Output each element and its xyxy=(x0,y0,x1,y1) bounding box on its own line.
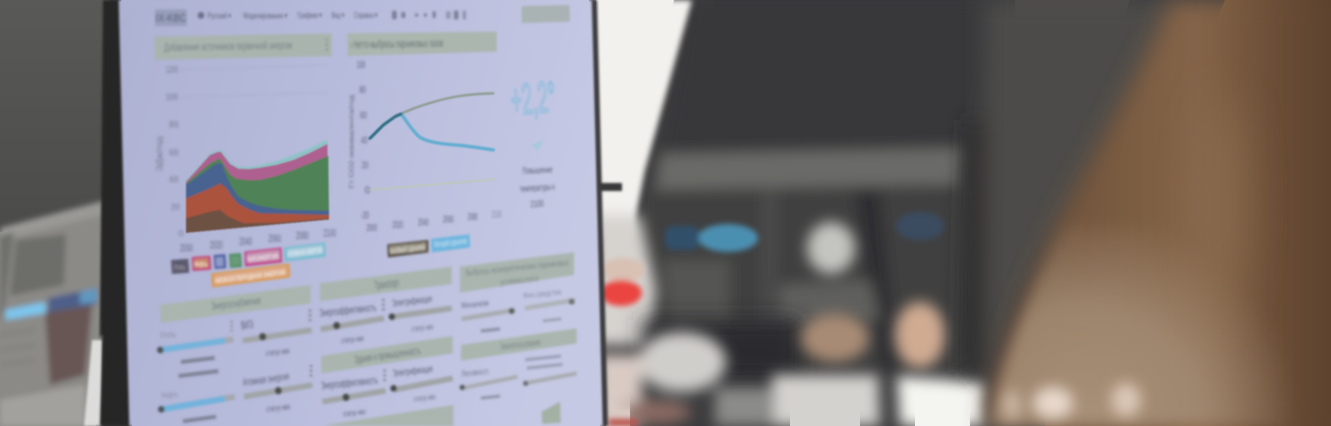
area chart legend: Уголь xyxy=(174,262,186,271)
logo xyxy=(155,9,187,26)
skin-tone objects xyxy=(801,302,945,368)
control section: energy supply: Энергоснабжение xyxy=(211,295,262,313)
area chart axes: 600 xyxy=(169,147,179,157)
desk items xyxy=(596,332,985,426)
line chart axes: -20 xyxy=(361,211,369,222)
area chart axes: 1000 xyxy=(166,92,178,102)
slider: electrification: Электрификация xyxy=(392,293,433,310)
slider: coal: Уголь xyxy=(159,329,176,340)
screen background xyxy=(119,0,603,426)
hair xyxy=(985,0,1331,426)
line chart axes: 2000 xyxy=(366,223,377,234)
monitor bezel xyxy=(100,0,608,426)
section heading xyxy=(320,267,452,301)
area chart axes xyxy=(155,64,336,255)
slider: energy efficiency xyxy=(319,299,384,345)
control section: land use xyxy=(460,328,577,424)
area chart axes: 2080 xyxy=(296,230,309,242)
temperature caption: Повышение xyxy=(522,164,553,176)
area chart legend xyxy=(171,242,326,287)
line chart axes xyxy=(349,60,502,234)
slider: energy efficiency: статус-кво xyxy=(341,334,365,345)
line chart axes: 2040 xyxy=(418,217,429,228)
temperature widget xyxy=(509,73,558,209)
temperature arrow xyxy=(531,139,543,151)
menu: Справка ▾ xyxy=(354,10,378,20)
monitor screen dashboard: 2100 xyxy=(492,209,502,220)
line chart axes: 0 xyxy=(365,186,371,197)
line chart axes: 40 xyxy=(361,136,368,147)
panel heading: primary energy sources xyxy=(154,33,332,60)
control section: transport xyxy=(319,267,452,345)
slider: energy efficiency: Энергоэффективность xyxy=(321,374,379,392)
line chart axes: Гт CO2-эквивалента/год xyxy=(349,95,356,188)
area chart axes: 400 xyxy=(169,174,179,184)
line chart axes: 2060 xyxy=(443,215,454,226)
control section: buildings and industry xyxy=(321,336,453,419)
monitor screen dashboard xyxy=(119,0,603,426)
control section: transport: Транспорт xyxy=(374,275,400,292)
stacked area chart xyxy=(155,64,336,287)
slider: coal xyxy=(157,321,233,378)
temperature caption: температуры к xyxy=(519,182,556,194)
temperature caption xyxy=(519,164,556,209)
bright globe xyxy=(807,222,855,274)
control section: non-energy emissions: Выбросы неэнергетических парниковых xyxy=(465,257,569,278)
toolbar icons xyxy=(392,11,466,19)
small dark bracket xyxy=(598,183,622,191)
slider: electrification: статус-кво xyxy=(413,392,436,404)
area layers xyxy=(186,139,329,233)
left background wall xyxy=(0,0,110,235)
area chart axes: 800 xyxy=(169,120,179,130)
lower white wall xyxy=(592,215,656,345)
control section: non-energy emissions xyxy=(460,252,575,333)
area chart legend: БИОЭНЕРГИЯ xyxy=(247,251,279,264)
area chart axes: 2100 xyxy=(323,227,336,239)
area chart legend: АТОМНАЯ ЭНЕРГИЯ xyxy=(287,245,323,259)
top navigation bar xyxy=(155,5,570,26)
line chart: net emissions xyxy=(349,60,502,257)
slider: oil: Нефть xyxy=(161,389,179,400)
area chart legend: НИЗКОУГЛЕРОДНАЯ ЭНЕРГИЯ xyxy=(214,268,286,285)
control section: non-energy emissions: углекислого xyxy=(500,273,539,287)
slider: electrification: статус-кво xyxy=(411,322,434,334)
section heading xyxy=(460,252,574,293)
area chart legend: Нефть xyxy=(194,260,208,269)
slider: nuclear energy: статус-кво xyxy=(266,402,291,414)
small green chart icon xyxy=(542,402,561,424)
area chart axes: 2040 xyxy=(239,236,252,248)
slider: renewable energy: статус-кво xyxy=(265,346,290,358)
area chart axes: 2060 xyxy=(268,233,281,245)
area chart axes: 1200 xyxy=(166,64,178,74)
line chart axes: 20 xyxy=(362,161,369,172)
slider: renewable energy: ВИЭ xyxy=(240,319,254,332)
slider: oil xyxy=(158,389,235,423)
control section: energy supply xyxy=(157,285,312,423)
line chart axes: 60 xyxy=(360,111,367,122)
menu: Вид ▾ xyxy=(332,10,345,20)
highlights on hair xyxy=(1004,383,1141,420)
left background device xyxy=(0,200,107,426)
panel heading: primary energy sources: Добавление источников первичной энергии xyxy=(164,40,292,54)
area chart axes: 2020 xyxy=(210,240,223,252)
line chart axes: 100 xyxy=(357,60,366,71)
control section: land use: Землепользование xyxy=(500,337,542,353)
section heading xyxy=(321,336,453,373)
slider: energy efficiency: статус-кво xyxy=(342,407,366,419)
logo: IX-KBC xyxy=(156,13,186,25)
slider: energy efficiency: Энергоэффективность xyxy=(319,302,377,320)
red object xyxy=(600,258,645,306)
slider: nuclear energy xyxy=(242,365,312,414)
section heading xyxy=(461,328,577,361)
area chart axes: ЭДж/год xyxy=(155,136,164,172)
panel heading: net greenhouse gas emissions xyxy=(347,32,497,56)
line chart axes: 2080 xyxy=(468,212,478,223)
menu: Графики ▾ xyxy=(298,10,322,20)
white wall strip xyxy=(592,0,692,235)
slider: forestation: Лесовосст. xyxy=(461,366,490,379)
control section: buildings and industry: Здания и промышленность xyxy=(354,345,421,366)
menu: Моделирование ▾ xyxy=(243,10,288,20)
line chart legend: БАЗОВЫЙ СЦЕНАРИЙ xyxy=(390,243,425,255)
menu xyxy=(198,10,378,20)
slider: electrification xyxy=(389,293,452,334)
slider: other gases: Фин.средства xyxy=(523,287,562,300)
line chart axes: 80 xyxy=(359,85,366,96)
area chart axes: 0 xyxy=(178,229,184,239)
temperature caption: 2100 xyxy=(530,198,544,209)
slider: renewable energy xyxy=(240,310,312,358)
panel heading: net greenhouse gas emissions: › Нетто-выбросы парниковых газов xyxy=(350,38,443,51)
slider: nuclear energy: Атомная энергия xyxy=(242,371,290,389)
blue screen glow xyxy=(665,212,944,252)
top right button xyxy=(522,5,570,23)
line chart: net emissions: ТЕКУЩИЙ СЦЕНАРИЙ xyxy=(433,237,467,249)
area chart axes: 2000 xyxy=(180,243,193,255)
line series xyxy=(370,93,495,190)
control section: bottom heading xyxy=(327,405,453,426)
right grey panel xyxy=(962,0,1180,390)
lighter hair ends xyxy=(990,95,1290,426)
background monitor xyxy=(640,0,1000,372)
dark desk shadow xyxy=(640,320,800,380)
slider: energy efficiency xyxy=(321,370,386,419)
white strip behind left bezel xyxy=(84,258,110,426)
slider: deforestation xyxy=(523,355,577,386)
line chart axes: 2020 xyxy=(392,220,403,231)
slider: methane: Механизм xyxy=(461,298,489,310)
monitor screen dashboard: +2,2° xyxy=(509,73,558,125)
area chart axes: 200 xyxy=(171,202,180,212)
section heading xyxy=(160,285,311,323)
menu: Русский ▾ xyxy=(208,10,231,20)
slider: electrification xyxy=(390,363,453,404)
slider: electrification: Электрификация xyxy=(392,363,433,380)
